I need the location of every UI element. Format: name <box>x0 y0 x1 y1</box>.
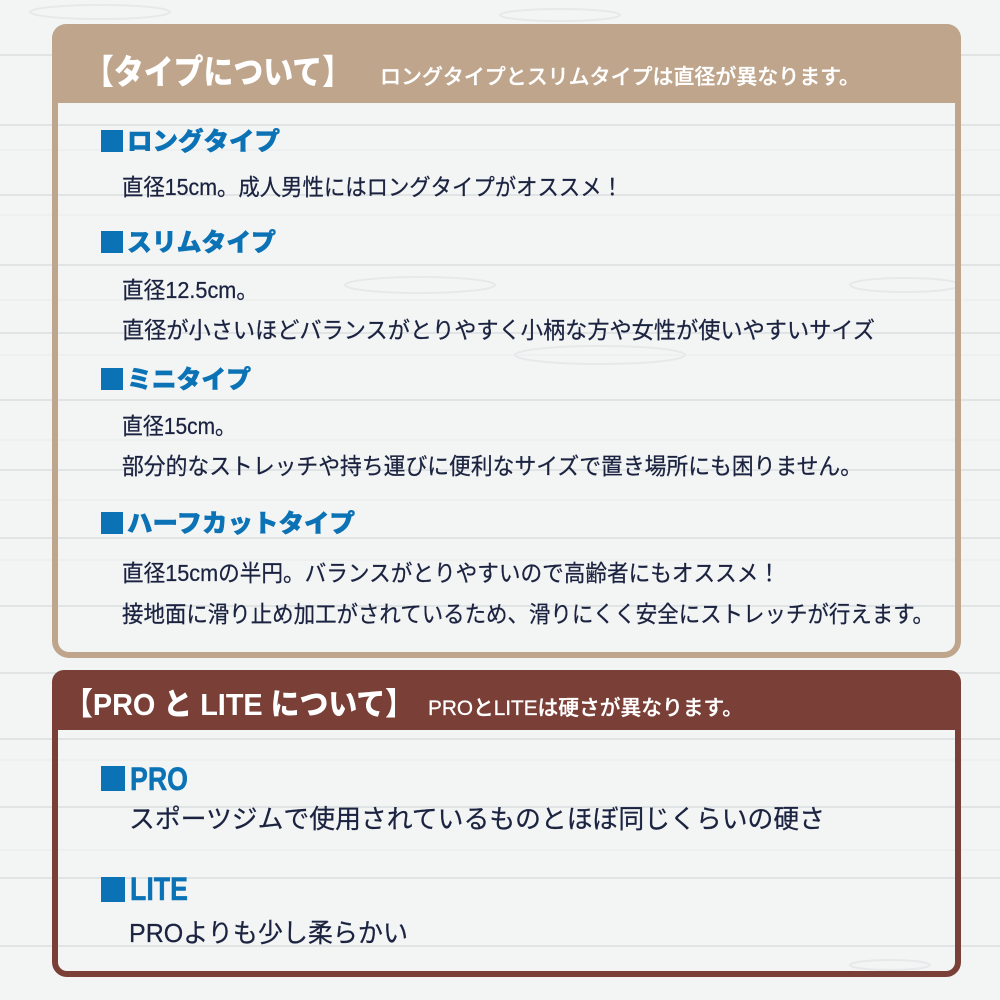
section: half cut <box>101 510 934 627</box>
section: half cut: 接地面に滑り止め加工がされているため、滑りにくく安全にストレッチが行えます。 <box>122 601 934 627</box>
section: long <box>101 127 623 200</box>
section: half cut: 直径15cmの半円。バランスがとりやすいので高齢者にもオススメ！ <box>122 560 780 586</box>
section: pro: PRO <box>130 761 188 797</box>
section: lite: PROよりも少し柔らかい <box>129 918 408 948</box>
panel header: type <box>52 24 961 103</box>
section: slim <box>101 229 875 343</box>
section: long: 直径15cm。成人男性にはロングタイプがオススメ！ <box>122 174 623 200</box>
heading: pro and lite: 【PRO と LITE について】 <box>64 687 414 722</box>
section: long: ロングタイプ <box>127 127 280 156</box>
section: mini: ミニタイプ <box>127 366 251 394</box>
panel: pro and lite <box>52 670 961 974</box>
section: half cut: ハーフカットタイプ <box>127 510 355 538</box>
section: mini <box>101 366 862 479</box>
heading: type: 【タイプについて】 <box>84 54 352 92</box>
section: mini: 部分的なストレッチや持ち運びに便利なサイズで置き場所にも困りません。 <box>122 453 862 479</box>
subtitle: pro and lite: PROとLITEは硬さが異なります。 <box>428 697 743 720</box>
section: slim: 直径が小さいほどバランスがとりやすく小柄な方や女性が使いやすいサイズ <box>122 317 875 343</box>
section: lite: LITE <box>130 871 188 907</box>
panel header: pro and lite <box>52 670 961 730</box>
panel: type <box>52 24 961 655</box>
section: pro: スポーツジムで使用されているものとほぼ同じくらいの硬さ <box>129 804 825 834</box>
section: slim: スリムタイプ <box>127 229 276 257</box>
section: lite <box>101 871 408 948</box>
section: pro <box>101 761 825 834</box>
section: mini: 直径15cm。 <box>122 413 236 439</box>
section: slim: 直径12.5cm。 <box>122 277 258 303</box>
subtitle: type: ロングタイプとスリムタイプは直径が異なります。 <box>380 66 860 89</box>
